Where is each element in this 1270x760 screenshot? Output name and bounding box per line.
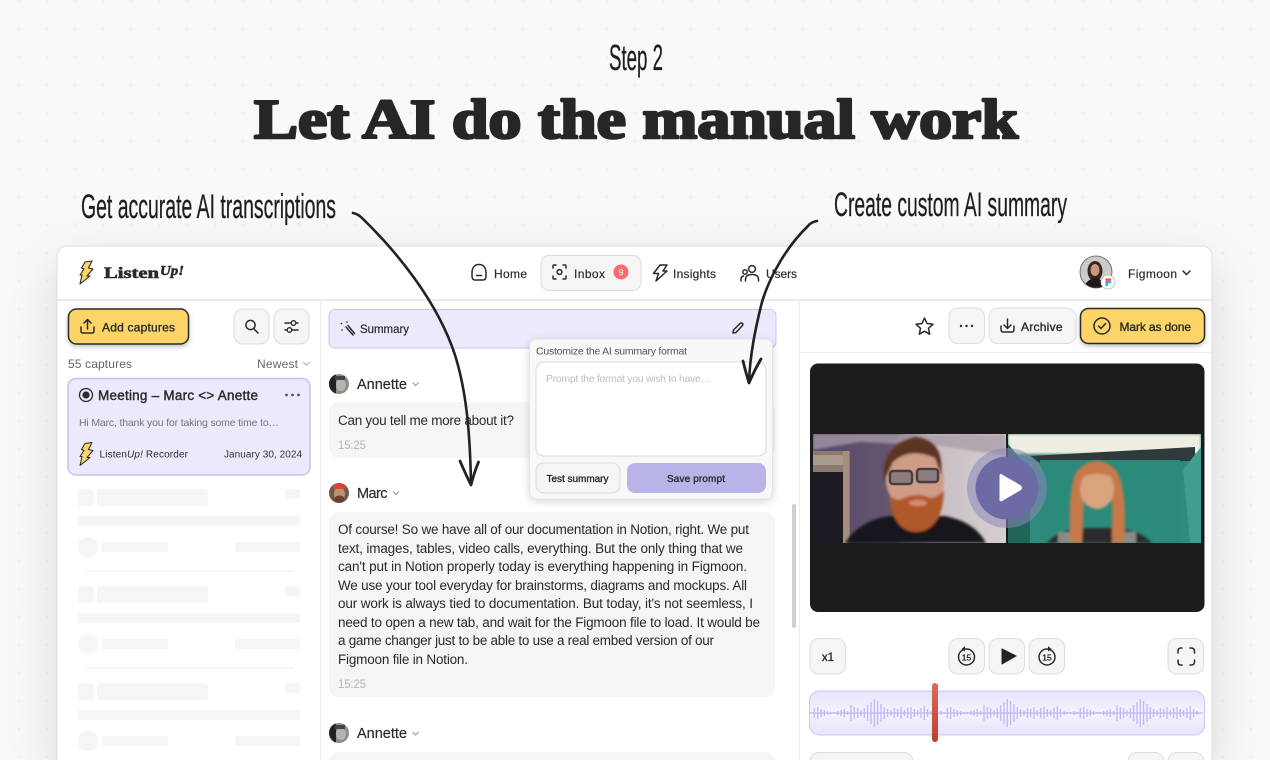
speaker: Annette [329,374,418,394]
message bubble: Marc: Figmoon file in Notion. [338,652,468,667]
popup: customize summary [530,339,772,499]
message bubble: Marc: our work is always tied to documentation. But today, it's not seemless, I [338,596,753,611]
callout: AI transcriptions: Get accurate AI transcriptions [81,188,336,226]
capture card: ListenUp! Recorder [100,450,189,460]
more button [949,308,984,344]
nav: insights [654,265,716,281]
panel: transcript [329,310,796,760]
arrow: transcript callout [353,213,478,485]
speed button [810,638,846,674]
summary bar: Summary [360,324,409,336]
message bubble: Annette: Can you tell me more about it? [338,413,514,428]
nav: users: Users [766,267,797,281]
add captures button [68,309,188,344]
test summary button: Test summary [546,474,608,485]
nav: inbox active: 9 [618,268,624,278]
play overlay [967,448,1047,528]
logo [80,261,184,284]
capture card: Meeting – Marc <> Anette [98,388,258,403]
filter button [274,309,309,344]
skeleton row 1 [78,489,300,571]
popup: customize summary: Customize the AI summary format [536,346,687,358]
skeleton row 2 [78,586,300,668]
message bubble: Marc: need to open a new tab, and wait for the Figmoon file to load. It would be [338,615,760,630]
archive button [989,308,1076,344]
search button [234,309,269,344]
favorite star [916,318,933,334]
user avatar [1080,256,1115,290]
speaker: Annette: Annette [357,377,407,393]
fullscreen button [1168,638,1204,674]
capture count: 55 captures [68,357,132,371]
speaker: Annette again: Annette [357,726,407,742]
bottom button left [810,752,913,760]
logo: Listen [104,265,159,282]
archive button: Archive [1021,320,1063,334]
video frame: Anette [1008,434,1201,543]
popup: customize summary: Prompt the format you wish to have… [546,373,711,385]
speaker: Marc: Marc [357,486,388,502]
message bubble: Marc: text, images, tables, video calls, everything. But the only thing that we [338,541,743,556]
save prompt button [627,463,766,493]
speed button: x1 [822,652,834,664]
rewind 15 button: 15 [962,652,971,662]
title: Let AI do the manual work [254,89,1019,151]
bottom button centre [1128,752,1164,760]
nav: insights: Insights [673,267,716,281]
message bubble: Marc: can't put in Notion properly today is everything happening in Figmoon. [338,559,747,574]
test summary button [536,463,620,493]
message bubble: Marc [329,512,775,697]
bottom button right [1168,752,1204,760]
panel: media player [810,308,1204,760]
speaker: Annette again [329,723,418,743]
add captures button: Add captures [102,320,175,334]
mark as done button [1080,308,1204,344]
nav: home: Home [494,267,527,281]
message bubble: Annette continued [329,752,775,760]
message bubble: Marc: 15:25 [338,679,366,691]
skeleton row 3 [78,683,300,751]
nav: users [741,266,797,281]
message bubble: Marc: We use your tool everyday for brainstorms, diagrams and mockups. All [338,578,747,593]
step label: Step 2 [609,37,663,78]
capture card: January 30, 2024 [224,450,302,460]
capture card [68,378,310,475]
save prompt button: Save prompt [667,474,725,485]
summary bar [329,310,776,348]
panel shadow [57,262,1212,760]
logo: Up! [160,263,184,278]
speaker: Marc [329,483,399,503]
nav: inbox active: Inbox [574,267,605,281]
message bubble: Marc: Of course! So we have all of our documentation in Notion, right. We put [338,522,749,537]
play button [989,638,1024,674]
message bubble: Marc: a game changer just to be able to use a real embed version of our [338,633,714,648]
nav: home [472,264,527,281]
audio waveform [810,683,1204,742]
arrow: summary callout [743,221,817,383]
video player [810,364,1204,612]
message bubble: Annette: 15:25 [338,440,366,452]
rewind 15 button [949,638,984,674]
nav: inbox active [541,256,641,290]
sort control: Newest [257,357,299,371]
top navigation bar [80,256,1190,290]
account name: Figmoon [1128,267,1177,281]
forward 15 button: 15 [1042,652,1052,662]
capture card: Hi Marc, thank you for taking some time to… [79,417,279,429]
scrollbar [792,504,796,628]
message bubble: Annette [329,402,775,458]
video frame: Marc [813,434,1006,543]
app window [57,246,1212,760]
callout: custom AI summary: Create custom AI summary [834,186,1067,224]
forward 15 button [1029,638,1064,674]
panel: captures sidebar [68,309,310,751]
mark as done button: Mark as done [1120,320,1191,334]
